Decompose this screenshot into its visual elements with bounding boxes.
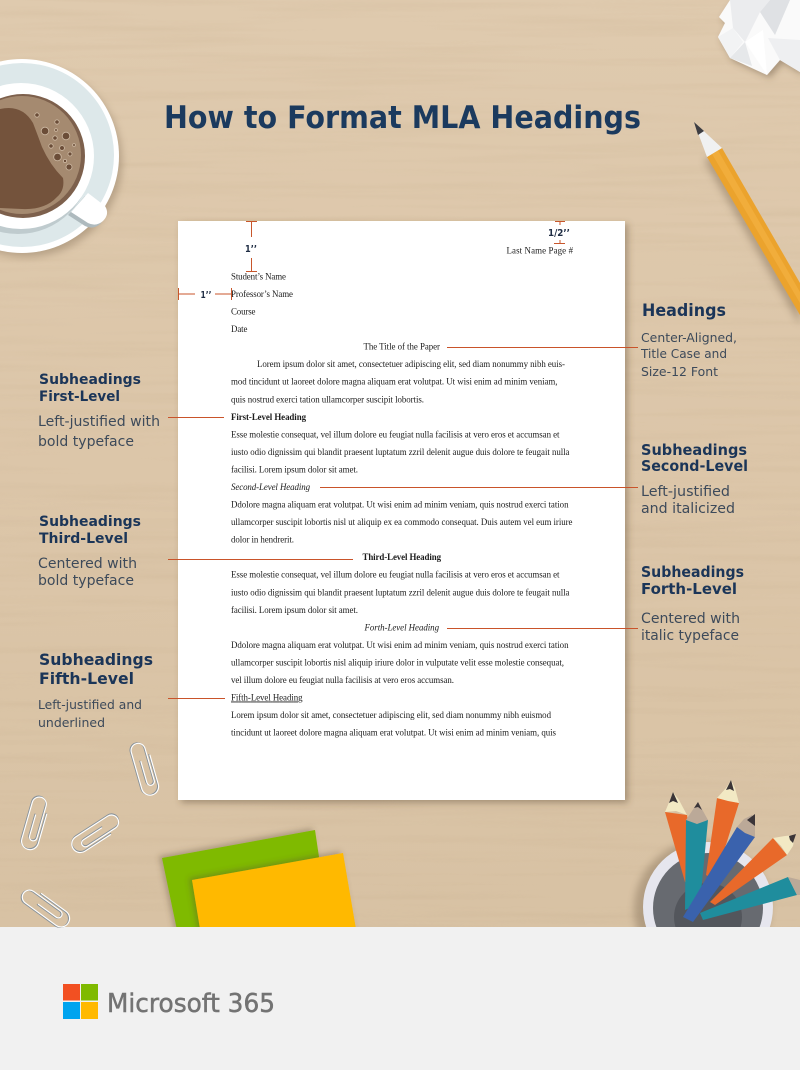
first-level heading: First-Level Heading (231, 412, 307, 422)
label: Subheadings Second-Level: Left-justified (641, 484, 730, 500)
paper title: The Title of the Paper (364, 342, 440, 352)
label: Headings (640, 301, 737, 379)
label: Subheadings Forth-Level (641, 563, 744, 644)
body paragraph six (231, 710, 557, 738)
logo squares (63, 984, 98, 1019)
student info block: Date (231, 324, 248, 334)
label: Subheadings Second-Level: Second-Level (641, 457, 748, 475)
orange pencil two (706, 780, 739, 880)
label: Subheadings Third-Level: Centered with (38, 556, 137, 572)
body paragraph four: facilisi. Lorem ipsum dolor sit amet. (231, 605, 358, 615)
label: Subheadings First-Level: Subheadings (39, 372, 141, 388)
body paragraph three (231, 500, 573, 544)
label: Subheadings Second-Level: Subheadings (641, 441, 747, 459)
icon: yellow pencil (694, 122, 800, 325)
body paragraph two: Esse molestie consequat, vel illum dolore eu feugiat nulla facilisis at vero eros et accumsan et (231, 430, 560, 440)
margin measure: top half inch: 1/2’’ (548, 228, 570, 239)
label: Subheadings Fifth-Level: Subheadings (39, 650, 153, 669)
body paragraph three: Ddolore magna aliquam erat volutpat. Ut wisi enim ad minim veniam, quis nostrud exerci tation (231, 500, 569, 510)
running head: Last Name Page # (506, 246, 574, 256)
label: Subheadings Fifth-Level: underlined (38, 715, 105, 730)
icon: coffee cup on saucer (0, 59, 122, 257)
label: Subheadings First-Level (38, 372, 160, 450)
orange pencil three (710, 834, 796, 905)
label: Subheadings First-Level: First-Level (39, 389, 120, 405)
body paragraph one (231, 359, 565, 404)
leader lines (168, 348, 638, 698)
body paragraph one: Lorem ipsum dolor sit amet, consectetuer adipiscing elit, sed diam nonummy nibh euis- (257, 359, 565, 369)
body paragraph four: Esse molestie consequat, vel illum dolore eu feugiat nulla facilisis at vero eros et accumsan et (231, 570, 560, 580)
label: Subheadings Forth-Level: italic typeface (641, 628, 739, 644)
label: Headings: Title Case and (640, 346, 727, 361)
body paragraph two: facilisi. Lorem ipsum dolor sit amet. (231, 464, 358, 474)
label: Subheadings First-Level: bold typeface (38, 434, 134, 450)
second-level heading: Second-Level Heading (231, 482, 311, 492)
footer band (0, 927, 800, 1070)
label: Subheadings Third-Level: Third-Level (39, 531, 128, 547)
body paragraph five: ullamcorper suscipit lobortis nisl aliquip iriure dolor in vulputate velit esse molestie consequat, (231, 658, 564, 668)
icon: sticky notes (162, 830, 357, 935)
label: Subheadings Forth-Level: Centered with (641, 611, 740, 627)
margin measure: top 1 inch: 1’’ (245, 244, 257, 255)
margin measure: top half inch (548, 222, 570, 244)
teal pencil two (700, 877, 800, 920)
fifth-level heading: Fifth-Level Heading (231, 692, 303, 702)
body paragraph four: iusto odio dignissim qui blandit praesent luptatum zzril delenit augue duis dolore te feugait nulla (231, 588, 570, 598)
label: Subheadings Fifth-Level: Left-justified and (38, 697, 142, 712)
body paragraph five: Ddolore magna aliquam erat volutpat. Ut wisi enim ad minim veniam, quis nostrud exerci tation (231, 640, 569, 650)
body paragraph six: tincidunt ut laoreet dolore magna aliquam erat volutpat. Ut wisi enim ad minim veniam, quis (231, 728, 557, 738)
orange pencil one (665, 792, 688, 882)
label: Subheadings Third-Level: bold typeface (38, 573, 134, 589)
forth-level heading: Forth-Level Heading (364, 622, 440, 632)
student info block: Course (231, 306, 256, 316)
body paragraph five: vel illum dolore eu feugiat nulla facilisis at vero eros accumsan. (231, 675, 454, 685)
label: Subheadings Second-Level (641, 441, 748, 517)
third-level heading: Third-Level Heading (362, 552, 442, 562)
label: Subheadings Fifth-Level (38, 650, 153, 730)
logo: Microsoft 365 (63, 984, 275, 1019)
label: Subheadings Forth-Level: Forth-Level (641, 580, 737, 598)
body paragraph one: quis nostrud exerci tation ullamcorper suscipit lobortis. (231, 394, 424, 404)
label: Subheadings Third-Level: Subheadings (39, 514, 141, 530)
body paragraph two: iusto odio dignissim qui blandit praesent luptatum zzril delenit augue duis dolore te feugait nulla (231, 447, 570, 457)
label: Headings: Size-12 Font (641, 364, 718, 379)
body paragraph two (231, 430, 570, 474)
icon: pencil holder with coloured pencils (631, 780, 800, 927)
margin measure: left 1 inch: 1’’ (200, 290, 212, 301)
body paragraph six: Lorem ipsum dolor sit amet, consectetuer adipiscing elit, sed diam nonummy nibh euismod (231, 710, 552, 720)
logo: Microsoft 365: Microsoft 365 (107, 989, 275, 1019)
margin measure: left 1 inch (178, 288, 232, 301)
teal pencil (685, 802, 708, 910)
label: Headings: Center-Aligned, (641, 330, 737, 345)
label: Headings: Headings (642, 301, 726, 321)
title: How to Format MLA Headings (164, 100, 641, 136)
body paragraph one: mod tincidunt ut laoreet dolore magna aliquam erat volutpat. Ut wisi enim ad minim veniam, (231, 376, 558, 386)
label: Subheadings Fifth-Level: Fifth-Level (39, 669, 134, 688)
margin measure: top 1 inch (245, 222, 257, 272)
student info block: Professor’s Name (231, 289, 293, 299)
student info block: Student’s Name (231, 272, 286, 282)
label: Subheadings Second-Level: and italicized (641, 501, 735, 517)
body paragraph five (231, 640, 569, 685)
blue pencil (683, 814, 755, 922)
body paragraph three: dolor in hendrerit. (231, 534, 294, 544)
body paragraph three: ullamcorper suscipit lobortis nisl ut aliquip ex ea commodo consequat. Duis autem vel eum iriure (231, 517, 573, 527)
label: Subheadings Forth-Level: Subheadings (641, 563, 744, 581)
label: Subheadings Third-Level (38, 514, 141, 589)
panel: MLA paper page (178, 221, 625, 800)
student info block (231, 272, 293, 334)
icon: paper clips (18, 740, 161, 931)
body paragraph four (231, 570, 570, 615)
icon: crumpled paper (718, 0, 800, 75)
label: Subheadings First-Level: Left-justified with (38, 414, 160, 430)
